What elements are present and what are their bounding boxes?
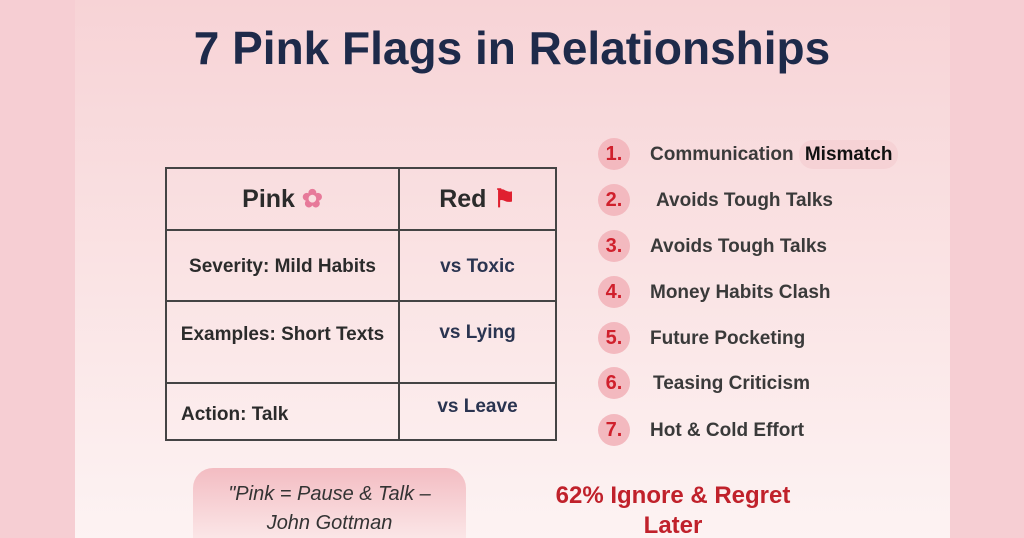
list item 6 xyxy=(598,367,810,399)
comparison table: vs Leave xyxy=(437,396,518,417)
statistic callout: 62% Ignore & Regret xyxy=(556,482,790,509)
list item 2: Avoids Tough Talks xyxy=(656,190,833,211)
list item 6: Teasing Criticism xyxy=(653,373,810,394)
list item 3 xyxy=(598,230,827,262)
list item 5: Future Pocketing xyxy=(650,328,805,349)
list item 4: Money Habits Clash xyxy=(650,282,831,303)
list item 3: Avoids Tough Talks xyxy=(650,236,827,257)
list item 7: 7. xyxy=(606,419,622,441)
comparison table: Action: Talk xyxy=(181,404,288,425)
list item 1: Communication Mismatch xyxy=(650,144,892,165)
list item 1 xyxy=(598,138,898,170)
list item 4: 4. xyxy=(606,281,622,303)
comparison table: Severity: Mild Habits xyxy=(189,256,376,277)
list item 6: 6. xyxy=(606,372,622,394)
comparison table: Red ⚑ xyxy=(439,185,516,213)
comparison table: vs Lying xyxy=(439,322,516,343)
list item 3: 3. xyxy=(606,235,622,257)
list item 2: 2. xyxy=(606,189,622,211)
list item 5 xyxy=(598,322,805,354)
list item 1: 1. xyxy=(606,143,622,165)
title: 7 Pink Flags in Relationships xyxy=(194,22,830,74)
list item 4 xyxy=(598,276,831,308)
comparison table xyxy=(165,167,557,441)
list item 7 xyxy=(598,414,804,446)
list item 5: 5. xyxy=(606,327,622,349)
comparison table: Pink ✿ xyxy=(242,185,323,213)
list item 7: Hot & Cold Effort xyxy=(650,420,804,441)
comparison table: vs Toxic xyxy=(440,256,515,277)
quote box: "Pink = Pause & Talk – xyxy=(228,483,431,505)
quote box xyxy=(193,468,466,538)
list item 2 xyxy=(598,184,833,216)
comparison table: Examples: Short Texts xyxy=(181,324,384,345)
statistic callout xyxy=(556,482,790,538)
quote box: John Gottman xyxy=(267,512,392,534)
